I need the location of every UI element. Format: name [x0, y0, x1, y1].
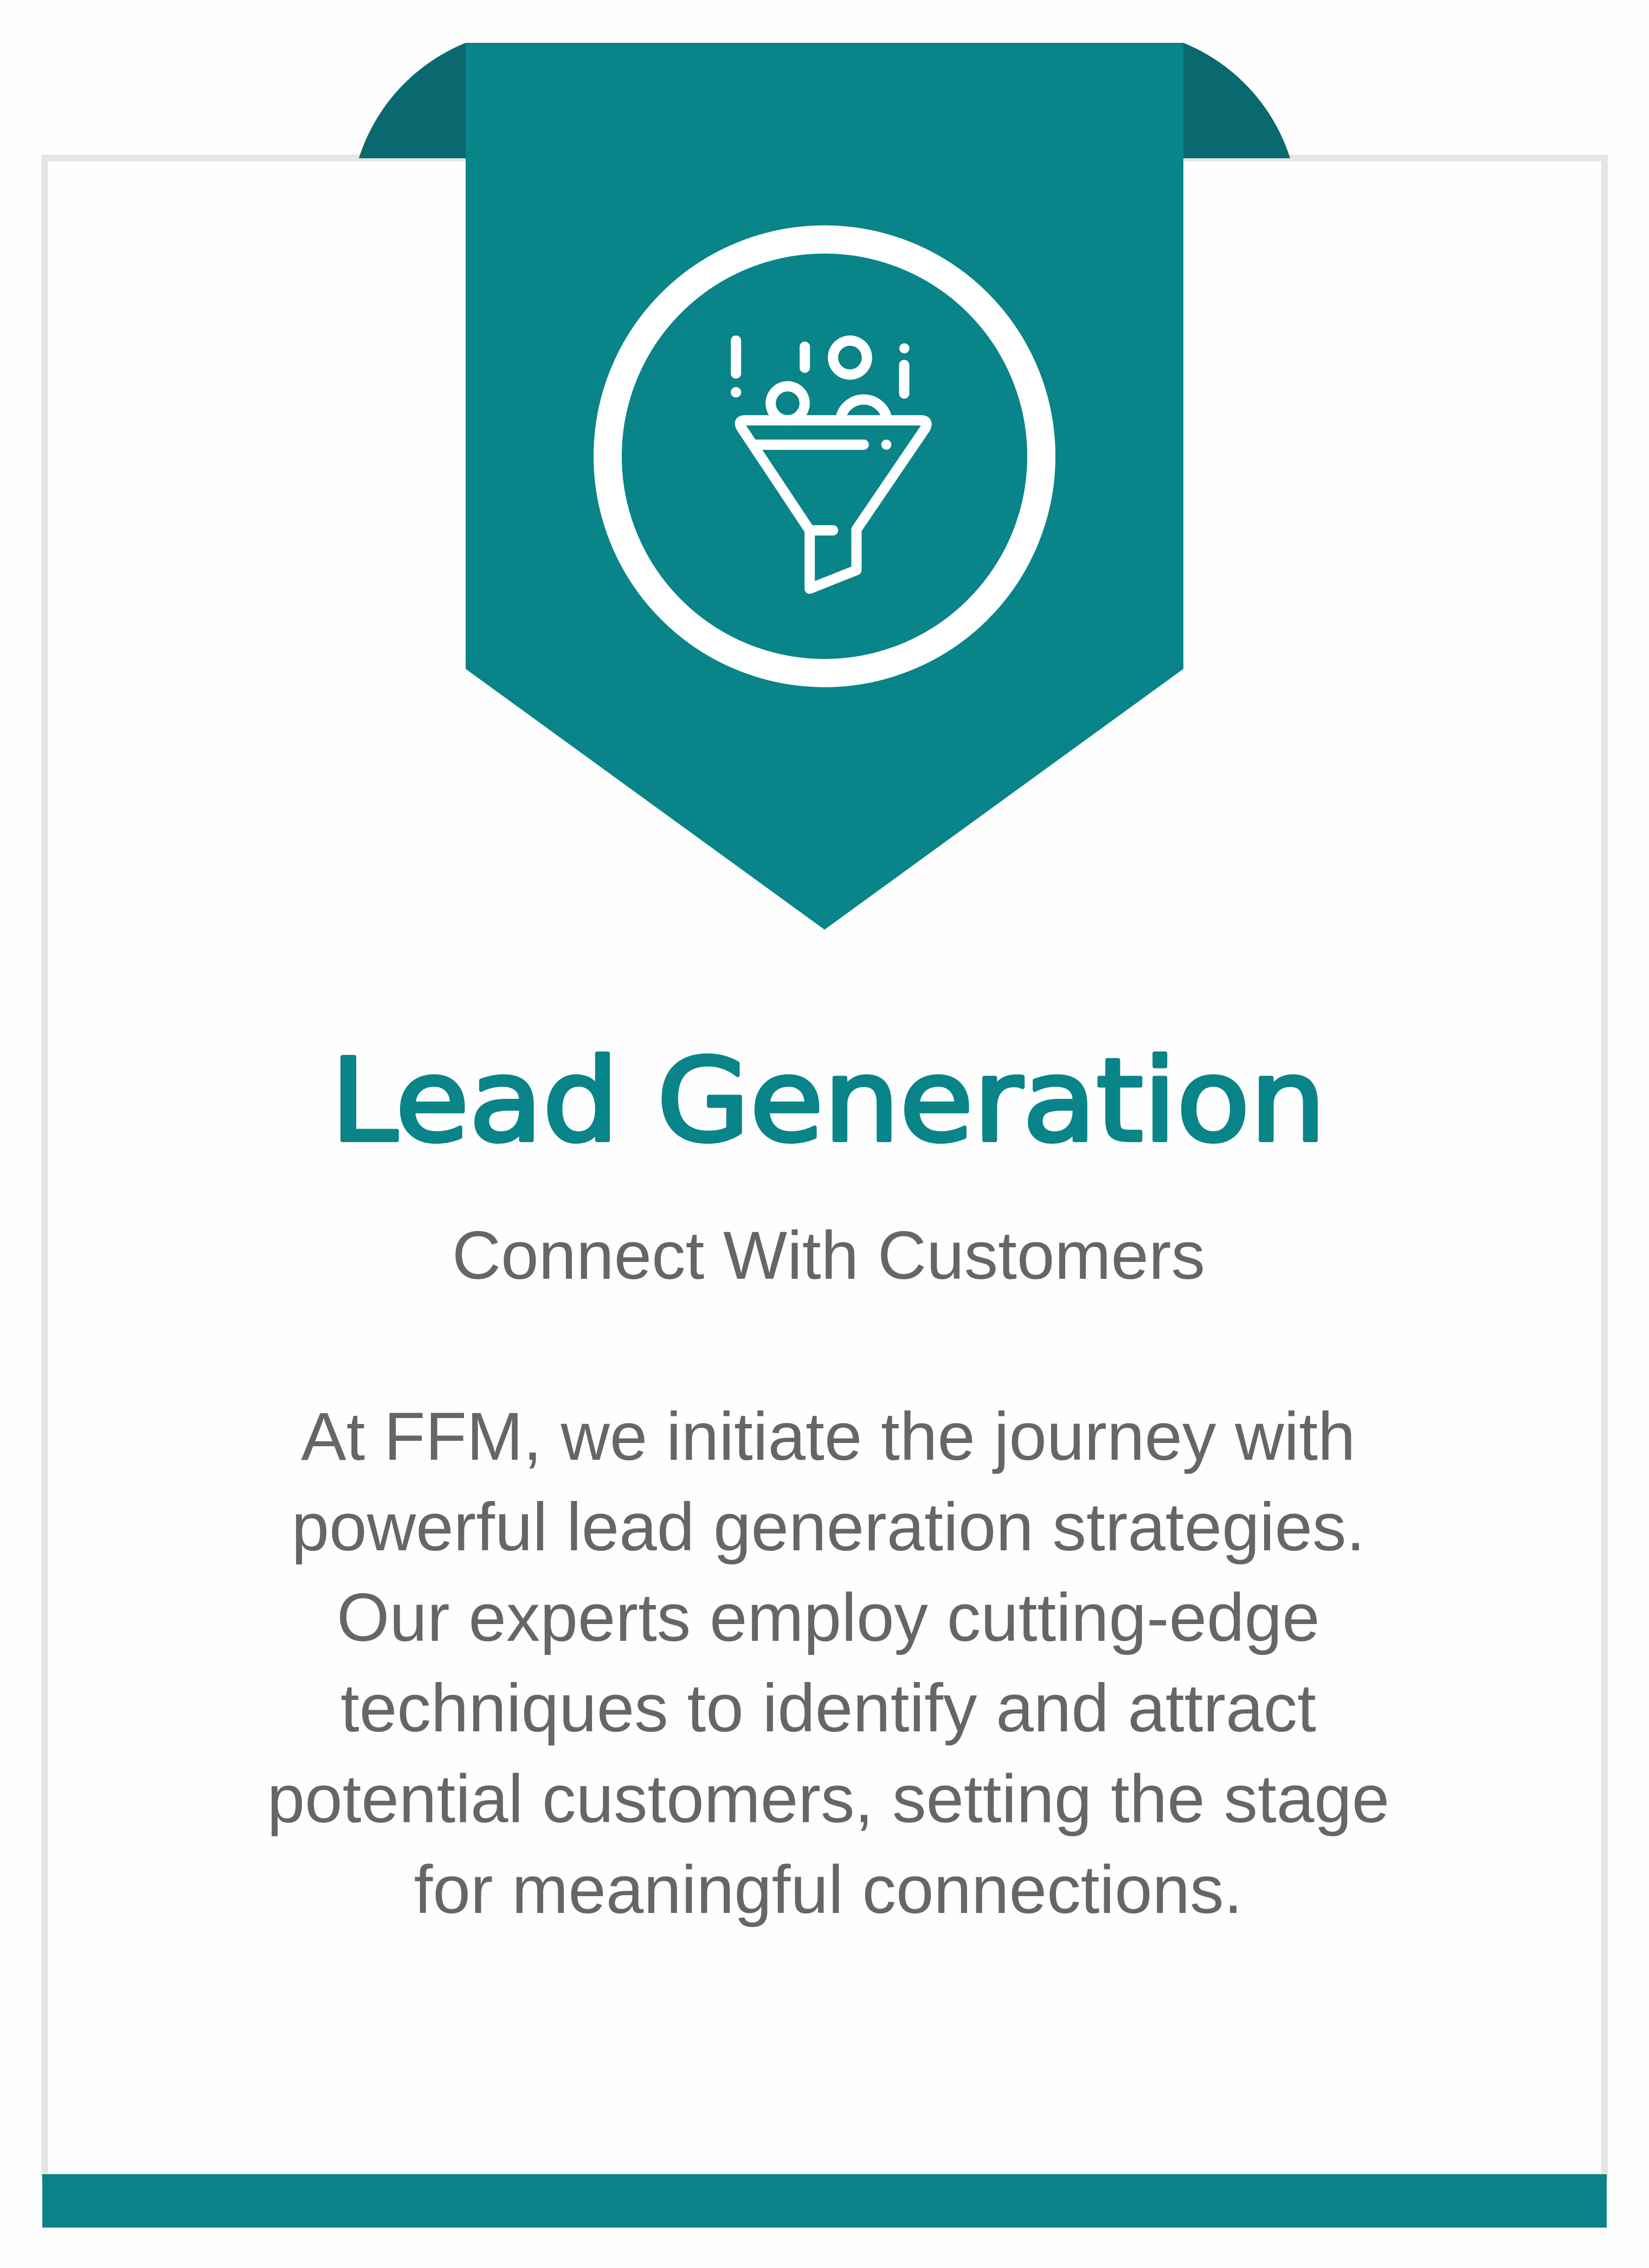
body paragraph: for meaningful connections.: [414, 1852, 1242, 1928]
ribbon banner: [466, 43, 1183, 930]
subtitle: Connect With Customers: [452, 1218, 1205, 1293]
body paragraph: Our experts employ cutting-edge: [337, 1580, 1320, 1655]
icon: funnel with falling particles: [731, 340, 926, 589]
body paragraph: techniques to identify and attract: [340, 1671, 1316, 1746]
ribbon fold: left tab: [359, 43, 466, 158]
body paragraph: powerful lead generation strategies.: [292, 1490, 1365, 1565]
ribbon fold: right tab: [1183, 43, 1290, 158]
title: Lead Generation: [331, 1034, 1326, 1168]
body paragraph: At FFM, we initiate the journey with: [301, 1399, 1356, 1474]
icon: ring around funnel: [608, 240, 1041, 673]
footer bar: [42, 2174, 1607, 2228]
body paragraph: [267, 1399, 1389, 1928]
body paragraph: potential customers, setting the stage: [267, 1762, 1389, 1837]
